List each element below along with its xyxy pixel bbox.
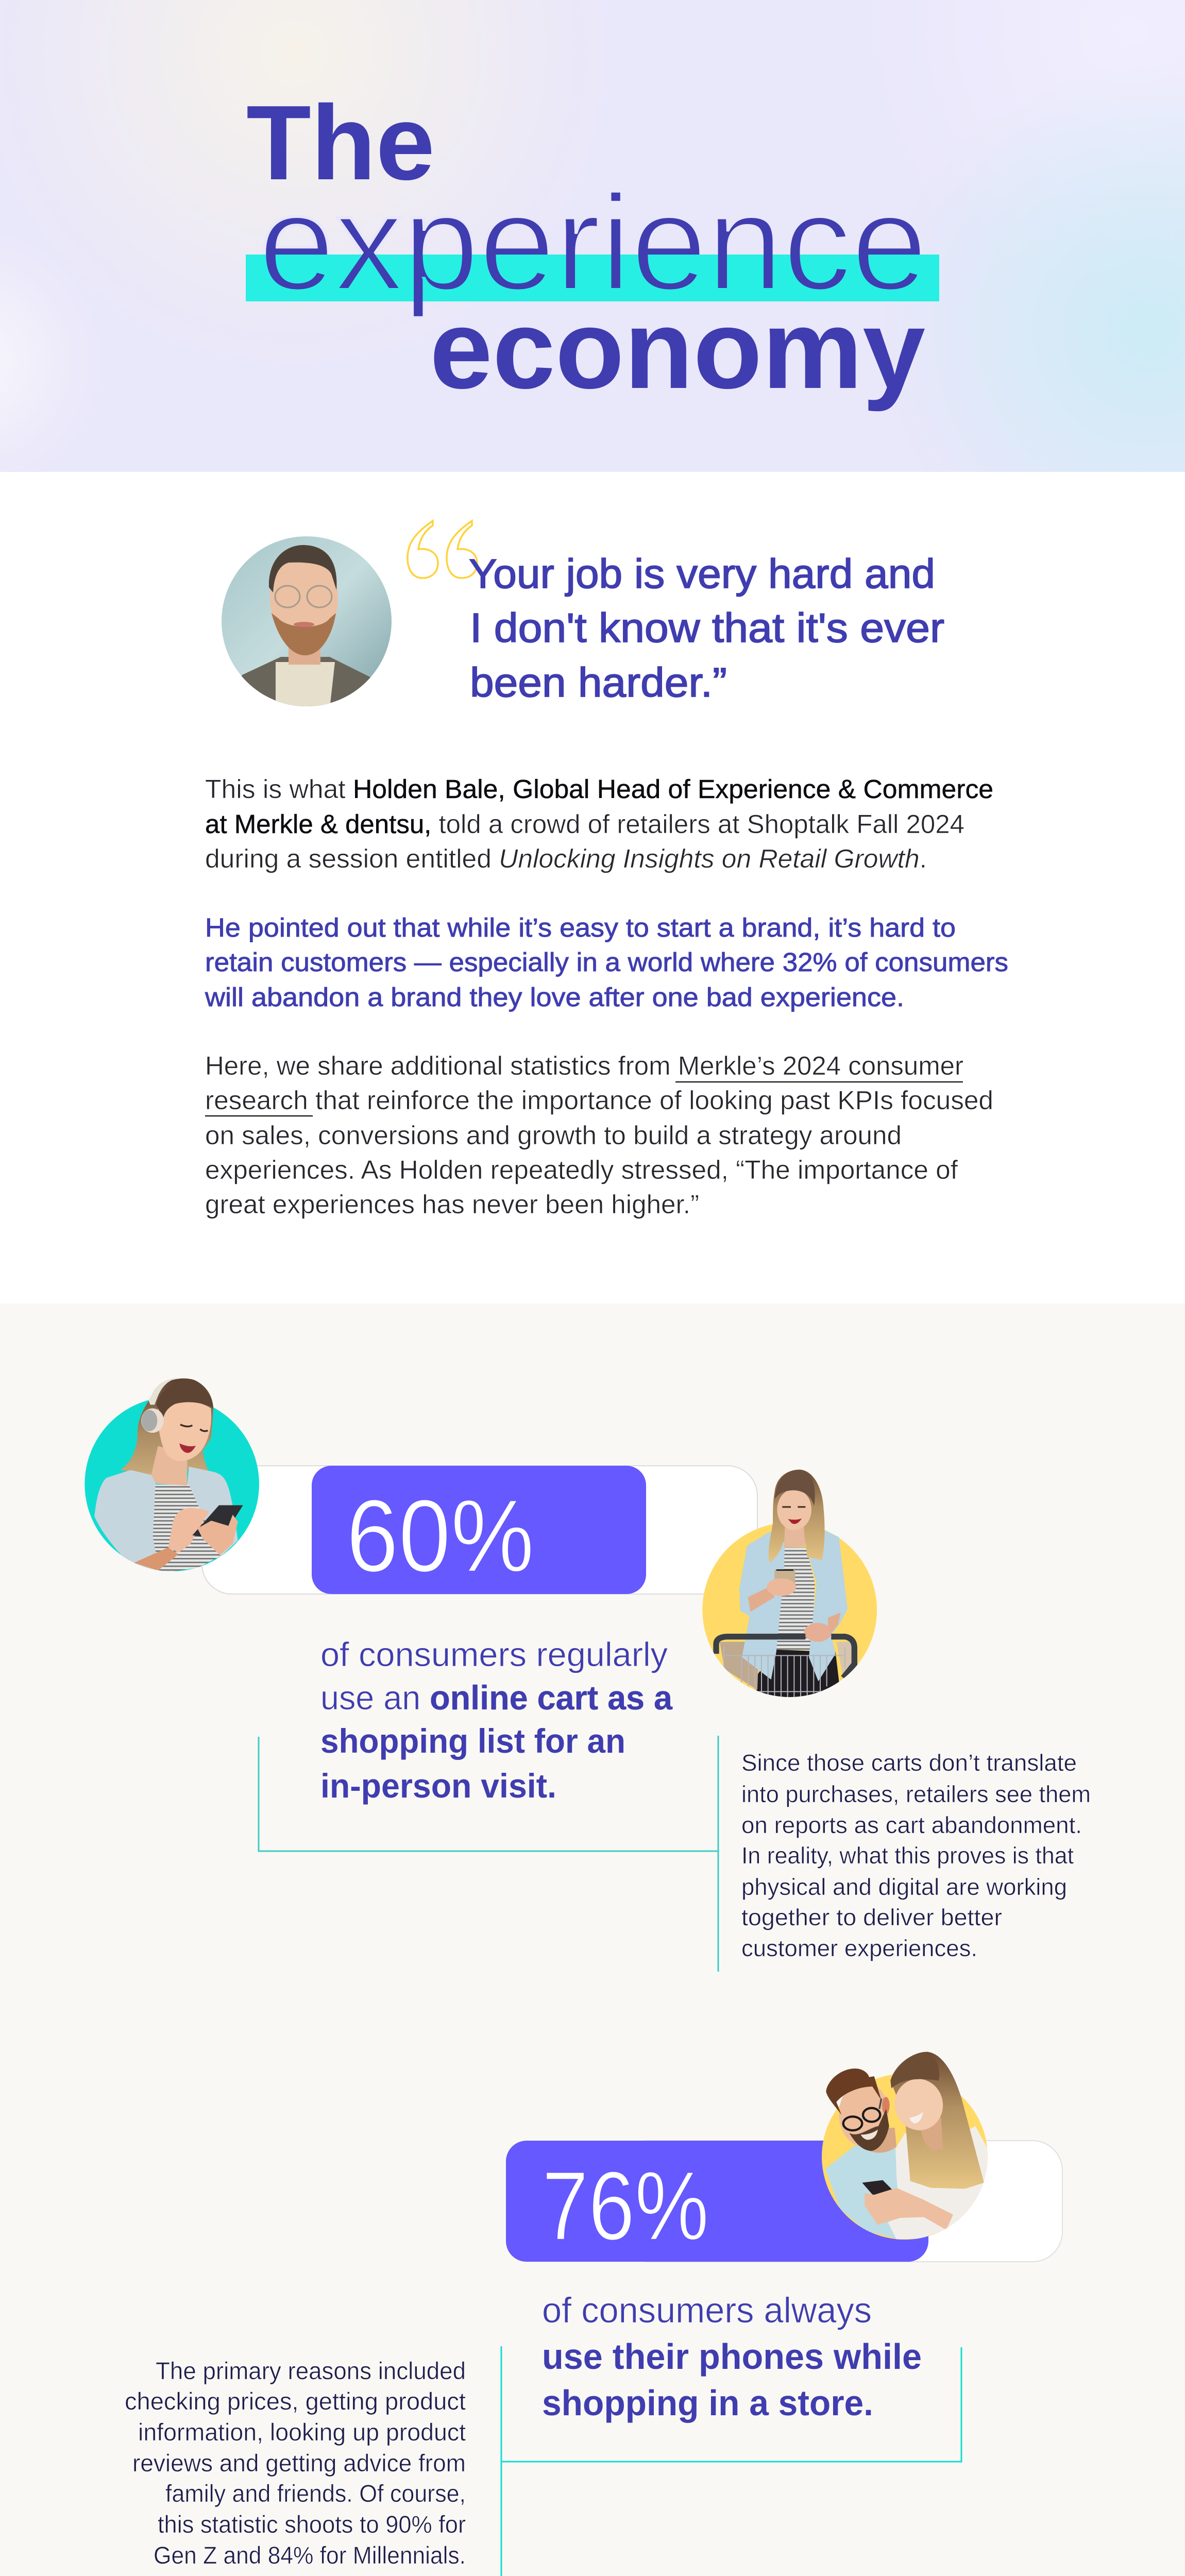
- side note: on reports as cart abandonment.: [741, 1812, 1082, 1838]
- stat description: [320, 1635, 673, 1805]
- stat description: [542, 2290, 922, 2423]
- text block: research paragraph: great experiences has never been higher.”: [205, 1190, 699, 1219]
- stat pill: [202, 1466, 757, 1594]
- text block: highlighted paragraph: He pointed out that while it’s easy to start a brand, it’s hard to: [205, 913, 956, 942]
- stat pill: [506, 2141, 1062, 2262]
- title word: economy: economy: [430, 287, 925, 412]
- panel: stat 76%: [125, 2052, 1062, 2576]
- panel: intro quote: [205, 521, 1008, 1219]
- side note: this statistic shoots to 90% for: [158, 2511, 466, 2538]
- stat description: shopping in a store.: [542, 2383, 873, 2423]
- text block: highlighted paragraph: retain customers — especially in a world where 32% of consumers: [205, 947, 1008, 977]
- side note: into purchases, retailers see them: [741, 1781, 1091, 1807]
- number: 76%: 76%: [542, 2151, 709, 2261]
- pull quote: I don't know that it's ever: [470, 605, 944, 651]
- side note: together to deliver better: [741, 1904, 1002, 1930]
- side note: Gen Z and 84% for Millennials.: [154, 2541, 466, 2569]
- text block: intro paragraph: at Merkle & dentsu, told a crowd of retailers at Shoptalk Fall 2024: [205, 809, 964, 839]
- photo: couple looking at phone: [822, 2052, 988, 2240]
- side note: information, looking up product: [138, 2418, 466, 2446]
- title word: The: The: [246, 83, 435, 202]
- text block: research paragraph: Here, we share additional statistics from Merkle’s 2024 consumer: [205, 1051, 963, 1080]
- icon: yellow quotation marks: [408, 521, 477, 578]
- side note: In reality, what this proves is that: [741, 1842, 1074, 1869]
- side note: checking prices, getting product: [125, 2387, 466, 2415]
- text block: intro paragraph: This is what Holden Bale, Global Head of Experience & Commerce: [205, 774, 993, 804]
- photo: woman with headphones and phone: [84, 1378, 259, 1573]
- text block: research paragraph: [205, 1051, 993, 1219]
- text block: research paragraph: experiences. As Holden repeatedly stressed, “The importance of: [205, 1155, 958, 1184]
- title word: experience: experience: [259, 166, 927, 319]
- text block: intro paragraph: [205, 774, 993, 873]
- text block: research paragraph: research that reinforce the importance of looking past KPIs focused: [205, 1086, 993, 1115]
- connector lines: [501, 2346, 961, 2576]
- side note: Since those carts don’t translate: [741, 1750, 1077, 1776]
- stat description: shopping list for an: [320, 1722, 625, 1760]
- pull quote: been harder.”: [470, 659, 727, 705]
- stat description: of consumers always: [542, 2290, 872, 2330]
- side note: customer experiences.: [741, 1935, 977, 1961]
- stat description: of consumers regularly: [320, 1635, 668, 1673]
- side note: physical and digital are working: [741, 1874, 1067, 1900]
- text block: research paragraph: on sales, conversions and growth to build a strategy around: [205, 1121, 902, 1150]
- panel: hero: [0, 0, 1185, 472]
- text block: intro paragraph: during a session entitled Unlocking Insights on Retail Growth.: [205, 844, 927, 873]
- panel: statistics background: [0, 1303, 1185, 2576]
- side note: family and friends. Of course,: [165, 2480, 466, 2507]
- photo: woman with shopping cart: [702, 1470, 877, 1699]
- pull quote: Your job is very hard and: [469, 551, 935, 597]
- connector lines: [259, 1736, 718, 1972]
- side note: The primary reasons included: [156, 2357, 466, 2384]
- side note: [741, 1750, 1091, 1961]
- stat description: in-person visit.: [320, 1767, 556, 1805]
- text block: highlighted paragraph: [205, 913, 1008, 1012]
- stat description: use their phones while: [542, 2336, 922, 2377]
- text block: highlighted paragraph: will abandon a brand they love after one bad experience.: [205, 982, 904, 1012]
- stat description: use an online cart as a: [320, 1679, 673, 1717]
- pull quote: [469, 551, 944, 705]
- panel: stat 60%: [84, 1378, 1091, 1972]
- side note: reviews and getting advice from: [132, 2449, 466, 2477]
- title highlight band: [246, 255, 939, 301]
- number: 60%: 60%: [346, 1479, 534, 1594]
- side note: [125, 2357, 466, 2569]
- photo: Holden Bale portrait: [222, 536, 392, 708]
